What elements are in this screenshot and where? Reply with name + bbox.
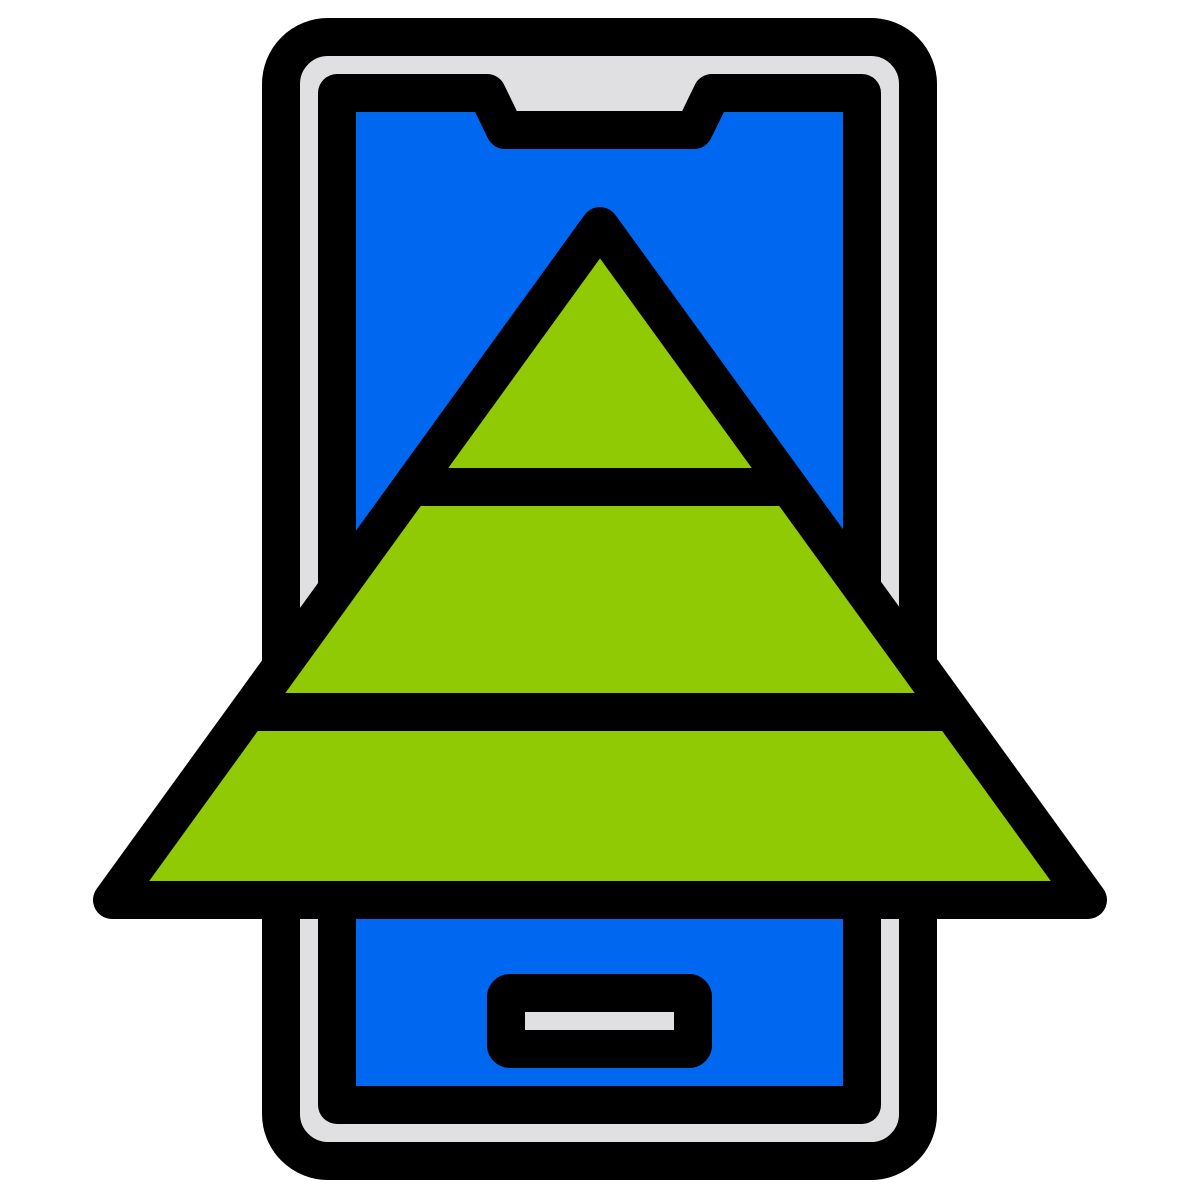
phone screen bbox=[337, 93, 862, 1105]
phone body bbox=[281, 37, 918, 1161]
home button bbox=[506, 993, 693, 1049]
pyramid chart bbox=[112, 226, 1088, 900]
